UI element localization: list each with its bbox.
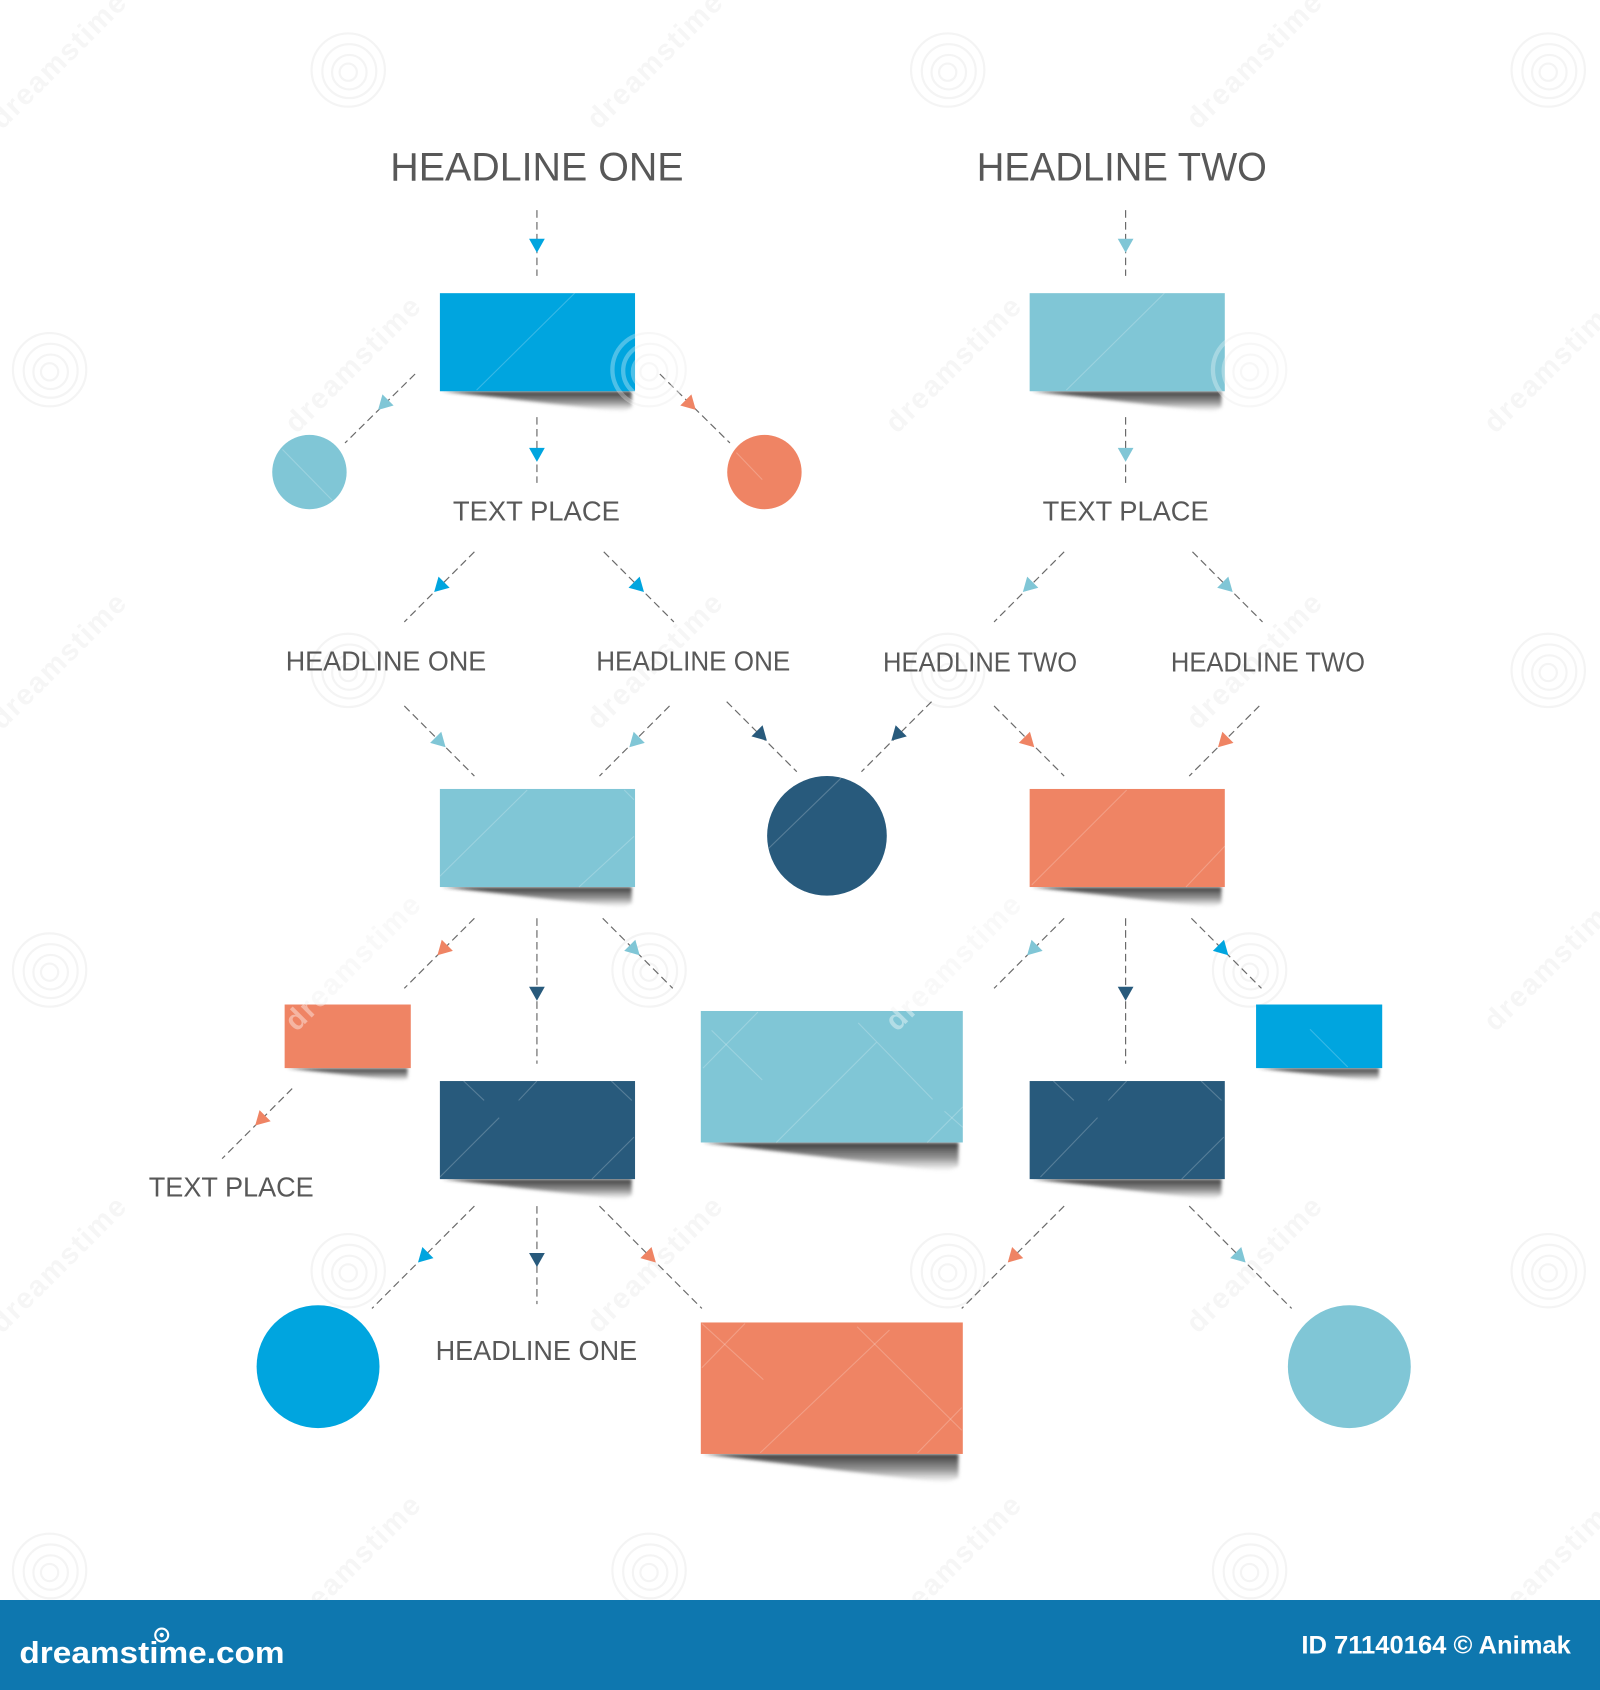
box: large light centre xyxy=(701,1011,963,1172)
arrow: light box to text place xyxy=(1118,417,1133,483)
box: large orange centre xyxy=(701,1322,963,1483)
circle: navy centre xyxy=(767,776,887,896)
text: headline two a: HEADLINE TWO xyxy=(883,646,1077,677)
arrow: row three b xyxy=(599,706,670,776)
arrow: row three e xyxy=(994,706,1064,776)
arrow: row five e xyxy=(1189,1206,1292,1308)
circle: light xyxy=(272,435,347,509)
watermark background: dreamstime xyxy=(581,587,729,736)
watermark overlay on shapes: dreamstime xyxy=(279,889,427,1037)
box: light middle left xyxy=(440,789,635,908)
arrow: row three d xyxy=(861,702,932,772)
circle: large blue xyxy=(257,1305,380,1428)
box: navy right xyxy=(1030,1081,1225,1200)
arrow: row three f xyxy=(1189,706,1259,776)
arrow: row two d xyxy=(1192,552,1263,622)
arrow: row four f xyxy=(1191,918,1261,988)
watermark background: dreamstime xyxy=(879,889,1028,1037)
arrow: row four a xyxy=(404,918,474,988)
text: text place right: TEXT PLACE xyxy=(1043,496,1209,527)
arrow: row four c xyxy=(603,918,673,988)
footer bar xyxy=(0,1600,1600,1690)
arrow: row five b xyxy=(529,1206,545,1304)
arrow: to orange circle xyxy=(660,374,730,443)
arrow: row five c xyxy=(599,1206,702,1308)
arrow: row two b xyxy=(604,552,674,622)
heading: headline two: HEADLINE TWO xyxy=(977,146,1267,190)
arrow: row five d xyxy=(962,1206,1064,1308)
watermark background: dreamstime xyxy=(279,291,427,439)
arrow: to light circle xyxy=(345,374,415,443)
watermark background: dreamstime xyxy=(581,1191,729,1339)
arrow: small orange box to text place xyxy=(222,1089,292,1159)
arrow: row two c xyxy=(994,552,1064,622)
footer logo: dreamstime.com: dreamstime.com xyxy=(19,1637,285,1670)
text: headline one bottom: HEADLINE ONE xyxy=(436,1335,637,1366)
arrow: row three c xyxy=(727,702,797,772)
box: navy left xyxy=(440,1081,635,1200)
circle: large light xyxy=(1288,1305,1411,1428)
arrow: row four e xyxy=(1118,918,1133,1064)
text: headline one a: HEADLINE ONE xyxy=(286,645,486,676)
watermark background: dreamstime xyxy=(279,889,427,1037)
arrow: row five a xyxy=(372,1206,474,1308)
box: light top right xyxy=(1030,293,1225,412)
text: text place left: TEXT PLACE xyxy=(453,496,620,527)
watermark background: dreamstime xyxy=(879,1489,1028,1638)
heading: headline one: HEADLINE ONE xyxy=(390,146,684,190)
watermark overlay on shapes xyxy=(279,293,1348,1453)
watermark background: dreamstime xyxy=(1180,587,1329,736)
watermark background: dreamstime xyxy=(279,1489,427,1638)
watermark background: dreamstime xyxy=(1180,1191,1329,1339)
arrow: row four d xyxy=(994,918,1064,988)
box: orange middle right xyxy=(1030,789,1225,908)
watermark overlay on shapes: dreamstime xyxy=(879,889,1028,1037)
footer credit: ID 71140164 © Animak xyxy=(1301,1632,1571,1659)
circle: orange xyxy=(727,435,802,509)
box: small orange xyxy=(285,1005,411,1081)
box: blue top left xyxy=(440,293,635,412)
arrow: headline two to light box xyxy=(1118,210,1133,276)
text: headline two b: HEADLINE TWO xyxy=(1171,646,1365,677)
arrow: row two a xyxy=(404,552,474,622)
arrow: headline one to blue box xyxy=(529,210,545,276)
arrow: row four b xyxy=(529,918,545,1064)
box: small blue xyxy=(1256,1005,1382,1081)
arrow: row three a xyxy=(404,706,474,776)
watermark background: dreamstime xyxy=(879,291,1028,439)
text: text place lower left: TEXT PLACE xyxy=(149,1171,314,1202)
text: headline one b: HEADLINE ONE xyxy=(596,645,790,676)
arrow: blue box to text place xyxy=(529,417,545,483)
